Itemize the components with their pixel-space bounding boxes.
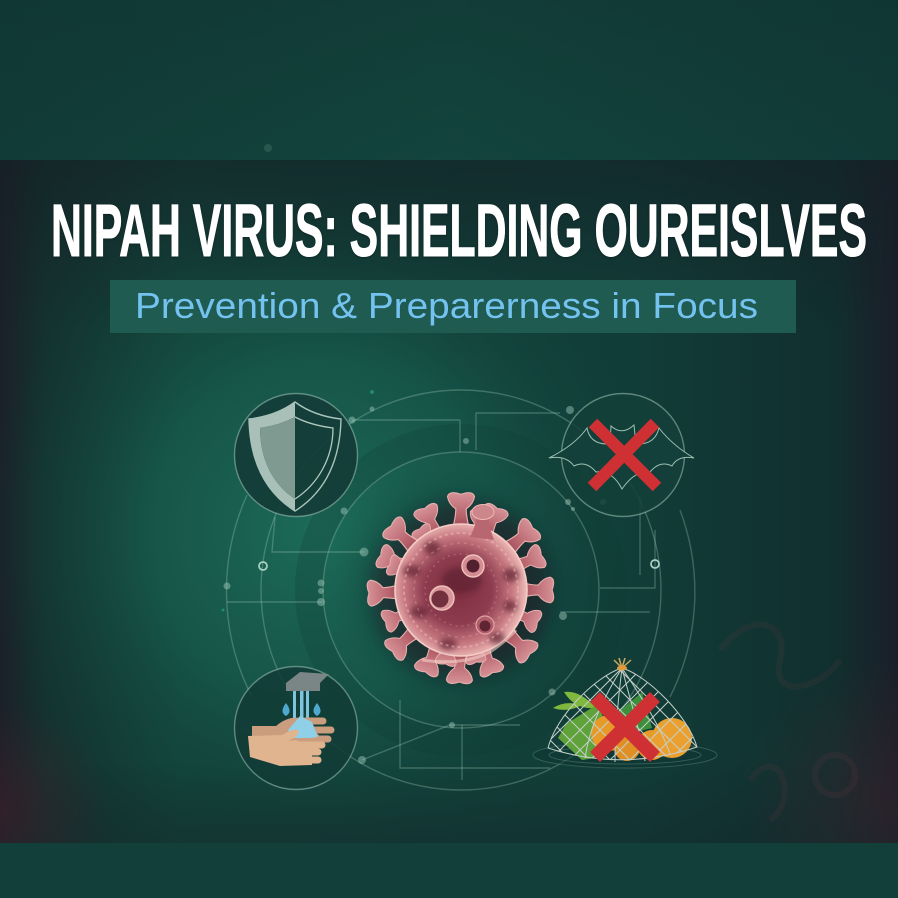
background: top band xyxy=(0,0,898,160)
circuit rings and connectors xyxy=(227,390,695,790)
icon: crossed-out fruit under net xyxy=(533,658,717,770)
icon: hand washing xyxy=(234,666,358,790)
circuit nodes xyxy=(222,144,659,764)
red cross xyxy=(595,697,655,757)
background: central dark band xyxy=(0,160,898,843)
background: bottom band xyxy=(0,843,898,898)
red cross xyxy=(592,423,657,487)
subtitle banner xyxy=(110,280,796,333)
net xyxy=(547,658,698,762)
virus body xyxy=(395,524,527,662)
back hand xyxy=(252,718,331,745)
virus surface craters and front spikes xyxy=(430,504,494,634)
oranges xyxy=(591,715,692,761)
icon: crossed-out bat xyxy=(549,394,694,516)
decorative red squiggles xyxy=(720,625,855,820)
water splash xyxy=(288,716,318,738)
front hand xyxy=(248,730,322,766)
water streams and drops xyxy=(282,691,320,727)
icon: shield xyxy=(234,394,358,516)
faucet xyxy=(286,672,329,691)
virus spikes xyxy=(367,493,554,684)
leaves xyxy=(553,692,652,760)
virus: central particle xyxy=(367,493,554,684)
water ripple xyxy=(533,742,717,768)
subtitle banner: Prevention & Preparerness in Focus xyxy=(135,285,758,326)
